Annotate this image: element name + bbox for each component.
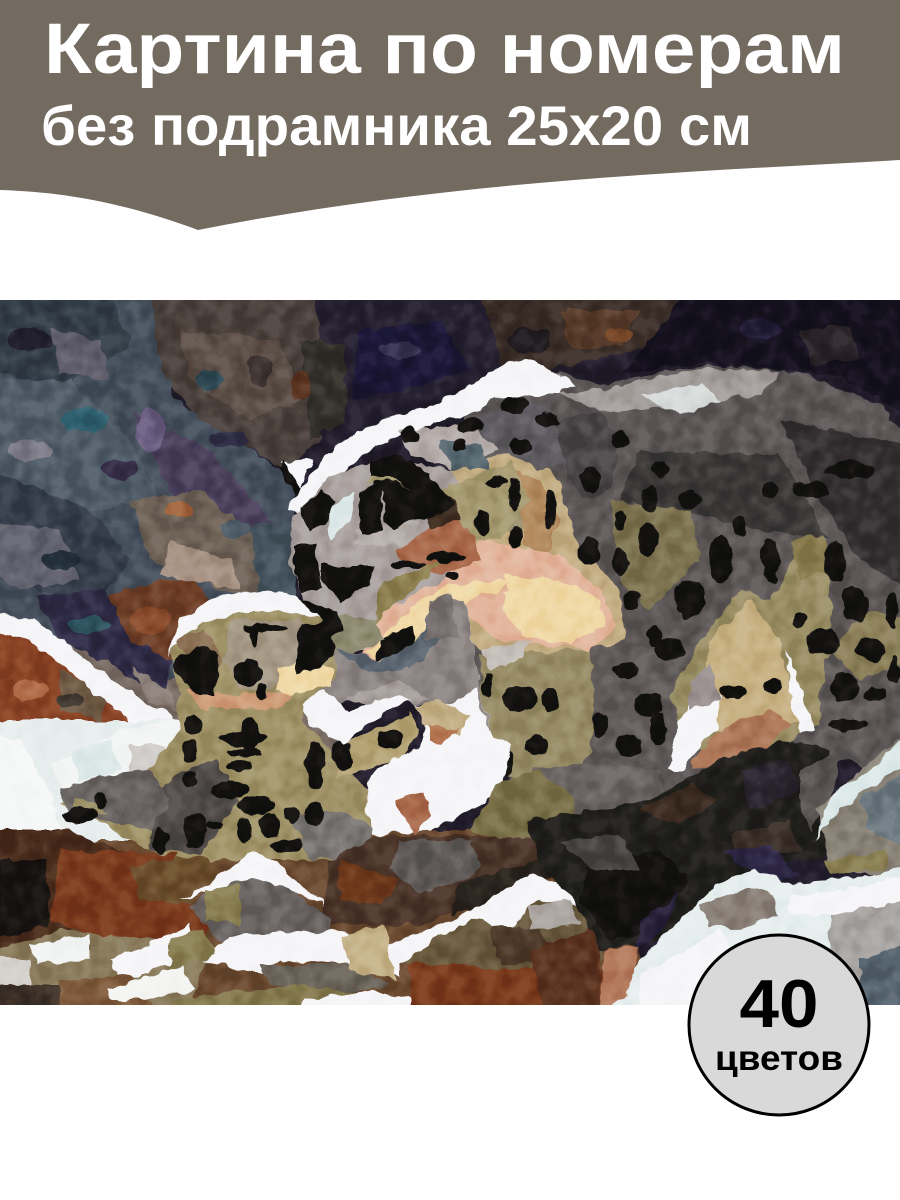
foreground ground and snow — [0, 690, 900, 1015]
big leopard spots — [350, 396, 900, 773]
badge label: цветов — [715, 1039, 843, 1078]
rock colour flecks — [8, 321, 782, 708]
title: Картина по номерам — [44, 10, 845, 89]
badge: 40 colours — [689, 935, 869, 1115]
painterly brush mottling — [0, 300, 900, 1005]
subtitle: без подрамника 25х20 см — [41, 94, 752, 157]
big leopard head — [278, 455, 530, 660]
grey slope between the leopards — [300, 595, 490, 730]
big leopard top snow and fur — [288, 358, 620, 520]
rocks: background — [0, 290, 900, 1015]
header banner — [0, 0, 900, 230]
cub — [60, 590, 420, 860]
badge number: 40 — [740, 966, 818, 1042]
cub markings — [62, 623, 402, 853]
painting: snow leopards — [0, 290, 900, 1015]
big leopard body — [440, 362, 900, 830]
snowy banks: left — [0, 720, 180, 840]
